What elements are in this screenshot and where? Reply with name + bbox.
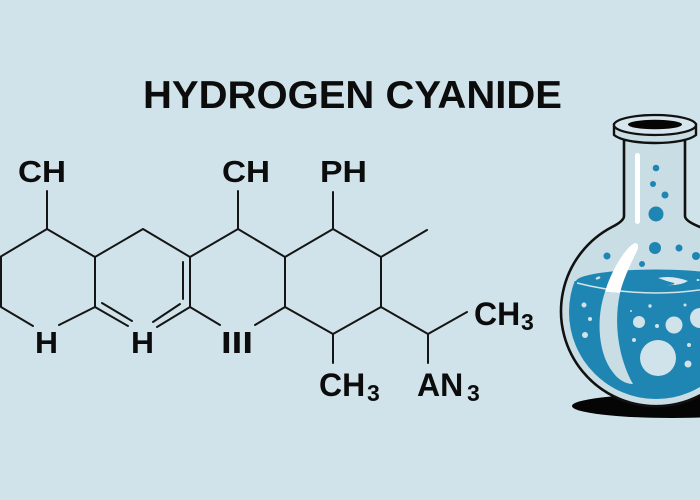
flask shadow xyxy=(572,394,700,418)
icon: flask xyxy=(561,115,700,418)
atom label: AN3: 3 xyxy=(467,380,480,406)
bonds xyxy=(0,191,467,363)
atom label: CH3 bottom: CH xyxy=(319,367,365,403)
flask rim xyxy=(614,115,696,143)
atom label: H middle: H xyxy=(131,325,154,360)
atom label: CH3 right: 3 xyxy=(521,309,534,335)
atom label: CH left: CH xyxy=(18,154,66,189)
white highlight on bulb xyxy=(605,243,638,293)
atom label: PH: PH xyxy=(320,154,367,189)
atom label: CH middle: CH xyxy=(222,154,270,189)
bubbles above liquid xyxy=(604,165,700,267)
chemical structure diagram xyxy=(0,154,534,406)
atom label: III: III xyxy=(221,325,253,360)
atom label: AN3: AN xyxy=(417,367,463,403)
atom label: CH3 right: CH xyxy=(474,296,520,332)
flask glass xyxy=(561,140,700,406)
atom label: H left: H xyxy=(35,325,58,360)
liquid xyxy=(569,270,700,399)
title: HYDROGEN CYANIDE xyxy=(143,74,562,117)
white highlight on neck xyxy=(635,153,640,224)
glass reflection in liquid xyxy=(600,292,633,384)
bubbles in liquid xyxy=(582,276,700,376)
atom label: CH3 bottom: 3 xyxy=(367,380,380,406)
